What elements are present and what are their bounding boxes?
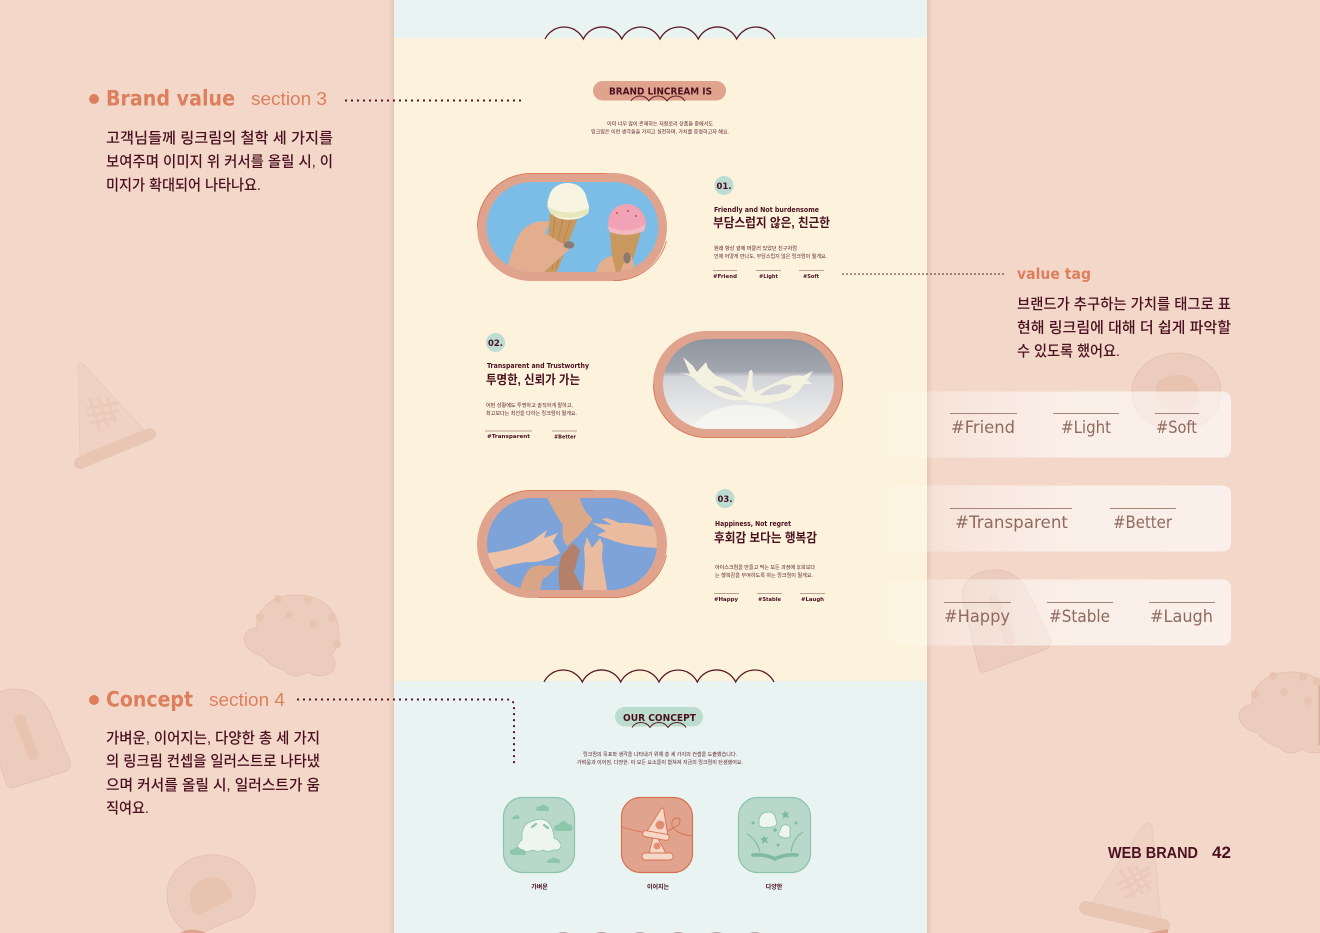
tag panel 3: #Stable xyxy=(1049,607,1110,627)
connector: value tag xyxy=(843,273,1004,275)
label: light: 가벼운 xyxy=(531,883,548,891)
item 3 text: #Happy xyxy=(714,597,738,603)
next section scallop peek xyxy=(544,933,774,934)
item 2 text: 02. xyxy=(488,339,503,349)
annotation: value tag xyxy=(1017,265,1231,360)
tag panel 1: #Light xyxy=(1061,418,1111,438)
tag panel 2: #Better xyxy=(1113,513,1172,533)
item 3 text: #Laugh xyxy=(801,597,824,603)
pill heading: our concept: OUR CONCEPT xyxy=(623,713,696,724)
concept intro text: 링크림의 목표와 생각을 나타내기 위해 총 세 가지의 컨셉을 도출했습니다. xyxy=(583,751,737,758)
annotation: value tag: 브랜드가 추구하는 가치를 태그로 표 xyxy=(1017,296,1231,313)
item 2 text: Transparent and Trustworthy xyxy=(487,362,589,370)
annotation: value tag: 수 있도록 했어요. xyxy=(1017,343,1120,360)
tag panel 1: #Soft xyxy=(1156,418,1197,438)
connector: brand value xyxy=(346,99,523,102)
item 2 text xyxy=(485,333,589,440)
item 1 text: #Soft xyxy=(803,274,819,280)
item 2 text: 어떤 상황에도 투명하고 솔직하게 말하고, xyxy=(486,402,573,409)
annotation: brand value xyxy=(89,86,333,194)
connector: concept xyxy=(298,700,514,764)
decorative mochi, bottom left xyxy=(167,855,255,933)
annotation: brand value: 고객님들께 링크림의 철학 세 가지를 xyxy=(106,130,333,147)
decorative cone, bottom right xyxy=(1086,823,1168,933)
decorative popsicle, left xyxy=(0,689,70,788)
annotation: concept: section 4 xyxy=(209,690,285,710)
item 2 text: #Transparent xyxy=(487,434,530,440)
pill heading: our concept xyxy=(615,707,703,728)
decorative cone, left xyxy=(78,363,150,463)
item 3 text: 아이스크림을 만들고 먹는 모든 과정에 후회보다 xyxy=(715,564,815,571)
annotation: brand value: Brand value xyxy=(106,86,235,110)
brand intro text: 이미 너무 많이 존재하는 저칼로리 상품들 중에서도 xyxy=(607,120,713,128)
annotation: concept: 직여요. xyxy=(106,800,149,817)
tag panel 1 xyxy=(866,392,1231,458)
brand intro text: 링크림은 이런 생각들을 가지고 실천하며, 가치를 증명하고자 해요. xyxy=(591,128,729,136)
annotation: concept xyxy=(89,688,320,817)
annotation: concept: 가벼운, 이어지는, 다양한 총 세 가지 xyxy=(106,730,320,747)
pill heading: brand lincream is xyxy=(593,81,726,101)
icon: varied sweets and book xyxy=(738,798,810,872)
tag panel 3 xyxy=(866,580,1231,646)
item 2 text: 투명한, 신뢰가 가는 xyxy=(486,372,580,387)
icon: connected cones xyxy=(622,798,692,872)
decorative popsicle, right xyxy=(962,570,1051,672)
tag panel 2: #Transparent xyxy=(955,513,1068,533)
tag panel 3: #Happy xyxy=(944,607,1010,627)
brand intro text xyxy=(591,120,729,136)
item 3 text: Happiness, Not regret xyxy=(715,520,792,528)
item 3 text: 는 행복감을 부여하도록 하는 링크림이 될게요. xyxy=(715,572,813,579)
footer: web brand page number: 42 xyxy=(1212,843,1231,862)
footer: web brand page number: WEB BRAND xyxy=(1108,845,1198,862)
photo oval 3: hands xyxy=(477,490,667,598)
item 1 text: 01. xyxy=(716,182,732,192)
annotation: brand value: section 3 xyxy=(251,89,327,109)
pill heading: brand lincream is: BRAND LINCREAM IS xyxy=(609,86,712,98)
scallop edge, top xyxy=(545,27,775,39)
decorative mochi, right xyxy=(1132,353,1221,430)
annotation: value tag: value tag xyxy=(1017,265,1091,283)
item 2 text: 최고보다는 최선을 다하는 링크림이 될게요. xyxy=(486,410,577,417)
scallop edge, concept section xyxy=(544,670,774,682)
photo oval 1: ice creams xyxy=(477,173,667,281)
concept intro text: 가벼움과 이어짐, 다양한. 이 모든 요소들이 합쳐져 지금의 링크림이 탄생했어요. xyxy=(577,759,743,766)
tag panel 3: #Laugh xyxy=(1150,607,1213,627)
item 3 text xyxy=(714,489,825,603)
annotation: value tag: 현해 링크림에 대해 더 쉽게 파악할 xyxy=(1017,320,1231,336)
item 1 text: Friendly and Not burdensome xyxy=(714,206,819,214)
item 2 text: #Better xyxy=(554,434,576,440)
concept intro text xyxy=(577,751,743,766)
annotation: concept: 의 링크림 컨셉을 일러스트로 나타냈 xyxy=(106,753,320,770)
item 1 text: #Light xyxy=(759,274,778,280)
annotation: concept: 으며 커서를 올릴 시, 일러스트가 움 xyxy=(106,777,320,794)
annotation: brand value: 보여주며 이미지 위 커서를 올릴 시, 이 xyxy=(106,154,333,170)
item 3 text: #Stable xyxy=(758,597,781,603)
annotation: concept: Concept xyxy=(106,688,193,712)
item 1 text: #Friend xyxy=(713,274,737,280)
item 1 text: 원래 항상 곁에 머물러 있었던 친구처럼 xyxy=(714,245,797,252)
right edge mark xyxy=(1318,685,1320,745)
label: diverse: 다양한 xyxy=(766,883,783,891)
decorative ice cream scoop, left xyxy=(244,595,341,676)
item 1 text: 언제 어떻게 만나도, 부담스럽지 않은 링크림이 될게요. xyxy=(714,253,827,260)
photo oval 2: milk splash xyxy=(653,331,843,438)
tag panel 1: #Friend xyxy=(951,418,1015,438)
item 3 text: 후회감 보다는 행복감 xyxy=(714,530,817,545)
column edge shadows xyxy=(388,0,394,933)
web page mockup column xyxy=(394,0,927,933)
item 3 text: 03. xyxy=(717,495,733,505)
tag panel 2 xyxy=(866,486,1231,552)
item 1 text: 부담스럽지 않은, 친근한 xyxy=(713,215,830,230)
label: connected: 이어지는 xyxy=(647,883,670,891)
item 1 text xyxy=(713,176,830,280)
decorative ice cream scoop, right xyxy=(1239,672,1320,753)
icon: light cloud scoop xyxy=(504,798,574,872)
annotation: brand value: 미지가 확대되어 나타나요. xyxy=(106,177,261,194)
